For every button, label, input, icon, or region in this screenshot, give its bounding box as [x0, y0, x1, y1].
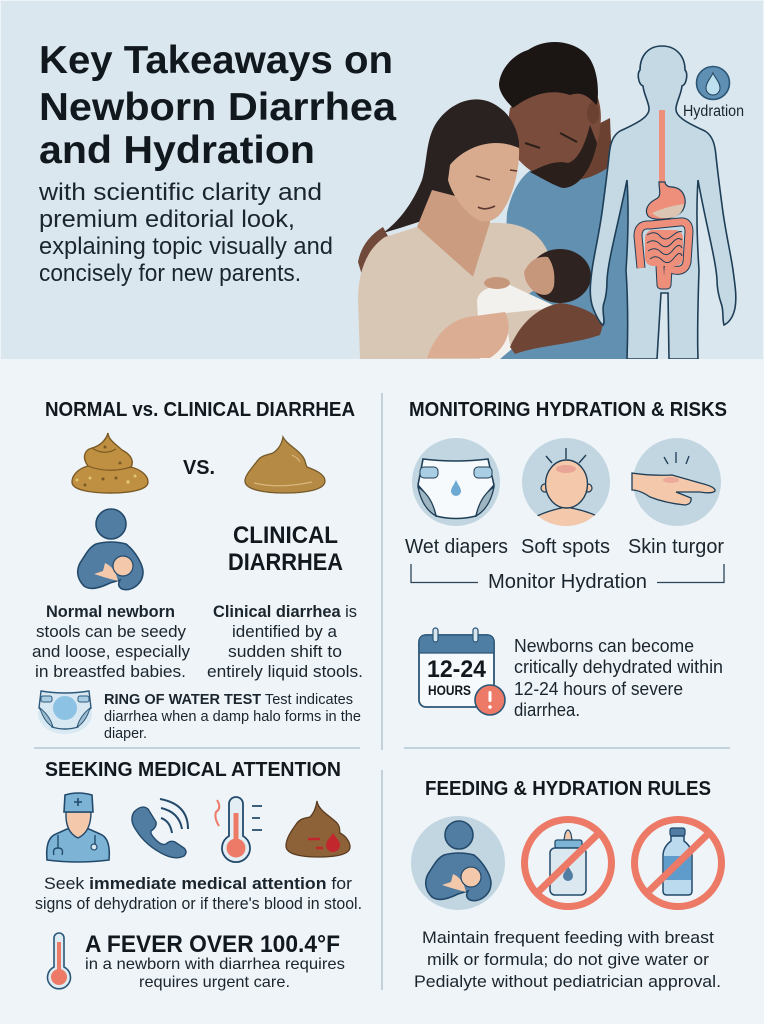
icon: wet diaper: [412, 438, 500, 526]
title: [39, 39, 396, 172]
subtitle: with scientific clarity and: [38, 179, 322, 206]
text: clinical diarrhea definition: Clinical diarrhea is: [213, 602, 357, 621]
text: seek immediate attention: [35, 874, 362, 913]
panel: seeking medical attention: [35, 758, 362, 991]
title: Key Takeaways on: [39, 39, 393, 82]
icon: no baby bottle: [524, 820, 612, 906]
icon: doctor: [47, 793, 109, 862]
subtitle: premium editorial look,: [39, 206, 295, 233]
text: clinical diarrhea definition: [207, 602, 363, 681]
text: ring of water test: [104, 692, 361, 742]
panel: normal vs clinical diarrhea: [32, 398, 363, 742]
heading: feeding rules: FEEDING & HYDRATION RULES: [425, 777, 711, 800]
label: vs: VS.: [183, 457, 215, 479]
heading: normal vs clinical: NORMAL vs. CLINICAL DIARRHEA: [45, 398, 355, 421]
icon: seedy stool: [72, 433, 148, 493]
callout: fever warning: [85, 931, 345, 991]
text: dehydration warning: [514, 636, 723, 720]
text: normal newborn stools: stools can be seedy: [36, 622, 186, 641]
icon: liquid stool: [245, 437, 325, 493]
bracket: monitor hydration: Monitor Hydration: [488, 570, 647, 593]
heading: clinical diarrhea: [228, 522, 343, 576]
icon: phone call: [132, 799, 188, 858]
icon: breastfeeding in circle: [411, 816, 505, 910]
text: feeding rule: milk or formula; do not give water or: [427, 950, 709, 969]
labels: monitoring signs: [405, 535, 724, 558]
bracket: monitor hydration: [411, 564, 724, 593]
labels: monitoring signs: Soft spots: [521, 535, 610, 558]
text: ring of water test: diarrhea when a damp halo forms in the: [104, 709, 361, 725]
icon: soft spots: [522, 438, 610, 530]
icon: no water bottle: [634, 820, 722, 906]
icon: 12-24 hours calendar: HOURS: [428, 682, 471, 698]
text: normal newborn stools: in breastfed babies.: [35, 662, 186, 681]
subtitle: concisely for new parents.: [39, 260, 301, 287]
callout: fever warning: A FEVER OVER 100.4°F: [85, 931, 340, 958]
text: feeding rule: Pedialyte without pediatrician approval.: [414, 972, 721, 991]
text: clinical diarrhea definition: identified by a: [232, 622, 338, 641]
text: seek immediate attention: Seek immediate medical attention for: [44, 874, 352, 893]
text: dehydration warning: diarrhea.: [514, 700, 580, 720]
heading: seeking medical attention: SEEKING MEDICAL ATTENTION: [45, 758, 341, 781]
panel: hero header: [1, 1, 763, 359]
text: normal newborn stools: and loose, especially: [32, 642, 190, 661]
labels: monitoring signs: Wet diapers: [405, 535, 508, 558]
icon: thermometer with heat: [215, 797, 262, 862]
title: Newborn Diarrhea: [39, 86, 396, 129]
text: ring of water test: diaper.: [104, 726, 147, 742]
text: normal newborn stools: [32, 602, 190, 681]
illustration: body silhouette with digestive tract: [590, 46, 736, 359]
icon: hydration drop: [696, 66, 730, 100]
text: clinical diarrhea definition: sudden shift to: [228, 642, 342, 661]
icon: stool with blood: [286, 801, 350, 857]
text: normal newborn stools: Normal newborn: [46, 602, 175, 621]
icon: breastfeeding parent: [78, 509, 143, 590]
callout: fever warning: requires urgent care.: [139, 974, 290, 991]
text: feeding rule: [414, 928, 721, 991]
callout: fever warning: in a newborn with diarrhea requires: [85, 956, 345, 973]
icon: 12-24 hours calendar: [419, 628, 505, 715]
text: seek immediate attention: signs of dehydration or if there's blood in stool.: [35, 894, 362, 913]
icon: diaper with damp halo: [38, 691, 92, 734]
subtitle: explaining topic visually and: [39, 233, 333, 260]
photo: parents holding newborn: [358, 42, 645, 359]
panel: feeding and hydration rules: [411, 777, 722, 991]
text: dehydration warning: 12-24 hours of severe: [514, 679, 683, 699]
labels: monitoring signs: Skin turgor: [628, 535, 724, 558]
text: clinical diarrhea definition: entirely liquid stools.: [207, 662, 363, 681]
icon: 12-24 hours calendar: 12-24: [427, 656, 487, 683]
label: hydration: Hydration: [683, 103, 744, 120]
text: feeding rule: Maintain frequent feeding with breast: [422, 928, 714, 947]
icon: skin turgor: [632, 438, 721, 526]
text: dehydration warning: critically dehydrated within: [514, 657, 723, 677]
subtitle: [38, 179, 333, 287]
icon: thermometer: [48, 933, 71, 989]
heading: clinical diarrhea: DIARRHEA: [228, 549, 343, 576]
heading: monitoring: MONITORING HYDRATION & RISKS: [409, 398, 727, 421]
heading: clinical diarrhea: CLINICAL: [233, 522, 338, 549]
title: and Hydration: [39, 129, 315, 172]
text: dehydration warning: Newborns can become: [514, 636, 694, 656]
text: ring of water test: RING OF WATER TEST Test indicates: [104, 692, 353, 708]
panel: monitoring hydration and risks: [405, 398, 727, 720]
